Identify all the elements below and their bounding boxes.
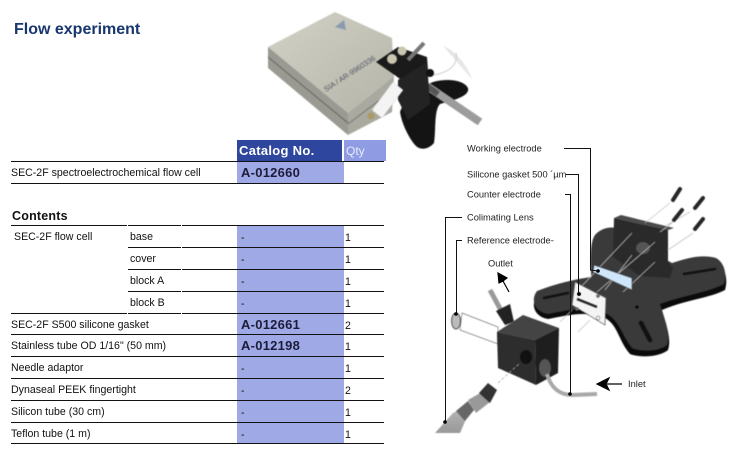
diagram labels: Reference electrode- [467,236,554,246]
diagram labels: Working electrode [467,144,542,154]
inlet tube [547,374,597,395]
product row: A-012660 [241,165,300,180]
contents table rows: SEC-2F S500 silicone gasket [11,319,149,331]
diagram labels: Outlet [488,258,513,268]
contents table rows [11,231,351,441]
contents table rows: SEC-2F flow cell [14,231,92,243]
contents table rows: 1 [345,276,351,288]
outlet arrow [498,273,509,292]
contents table rows: Silicon tube (30 cm) [11,406,105,418]
contents table rows: 2 [345,385,351,397]
leader lines [443,148,600,424]
contents table rows: Stainless tube OD 1/16" (50 mm) [11,340,166,352]
contents table rows: 1 [345,232,351,244]
outlet tube [490,290,514,325]
catalog column shading [237,161,344,443]
table header: quantity [344,140,386,161]
contents table rows: 1 [345,407,351,419]
diagram labels: Inlet [628,379,646,389]
contents table rows: - [241,276,245,288]
contents table rows: Teflon tube (1 m) [11,428,90,440]
contents table rows: 1 [345,429,351,441]
photo: flow cell [268,12,480,149]
contents table rows: block A [130,275,165,287]
inlet arrow [597,378,622,390]
contents table rows: - [241,298,245,310]
working electrode strip [593,265,632,290]
contents table rows: 1 [345,363,351,375]
contents table rows: 1 [345,341,351,353]
table header: catalog number [237,140,342,161]
exploded diagram: base plate [534,215,726,356]
contents table rows: 1 [345,298,351,310]
contents table rows: A-012661 [241,317,300,332]
flow cell block [497,315,559,385]
table rules [11,162,384,444]
contents table rows: - [241,429,245,441]
contents table rows: A-012198 [241,338,300,353]
fiber connector and tube [435,363,520,433]
photo: flow cell: SIA / AR-9960336 [322,54,377,94]
contents table rows: - [241,254,245,266]
contents table rows: - [241,363,245,375]
table header: quantity: Qty [346,144,365,158]
contents table rows: - [241,385,245,397]
contents table rows: 1 [345,254,351,266]
diagram labels: Colimating Lens [467,212,534,222]
table header: catalog number: Catalog No. [239,143,315,158]
exploded diagram: screws and guide lines [560,189,703,332]
diagram labels: Silicone gasket 500 ´µm [467,170,567,180]
collimating lens [452,313,498,344]
contents table rows: base [130,231,153,243]
contents table rows: block B [130,297,165,309]
product row [11,165,300,180]
diagram labels [467,144,646,389]
contents table rows: 2 [345,320,351,332]
contents table rows: - [241,232,245,244]
contents table rows: - [241,407,245,419]
contents table rows: Dynaseal PEEK fingertight [11,384,136,396]
diagram labels: Counter electrode [467,190,541,200]
title: Flow experiment [14,21,141,38]
contents heading: Contents [12,209,68,223]
contents table rows: Needle adaptor [11,362,84,374]
contents table rows: cover [130,253,156,265]
silicone gasket plate [572,282,606,325]
product row: SEC-2F spectroelectrochemical flow cell [11,167,201,179]
